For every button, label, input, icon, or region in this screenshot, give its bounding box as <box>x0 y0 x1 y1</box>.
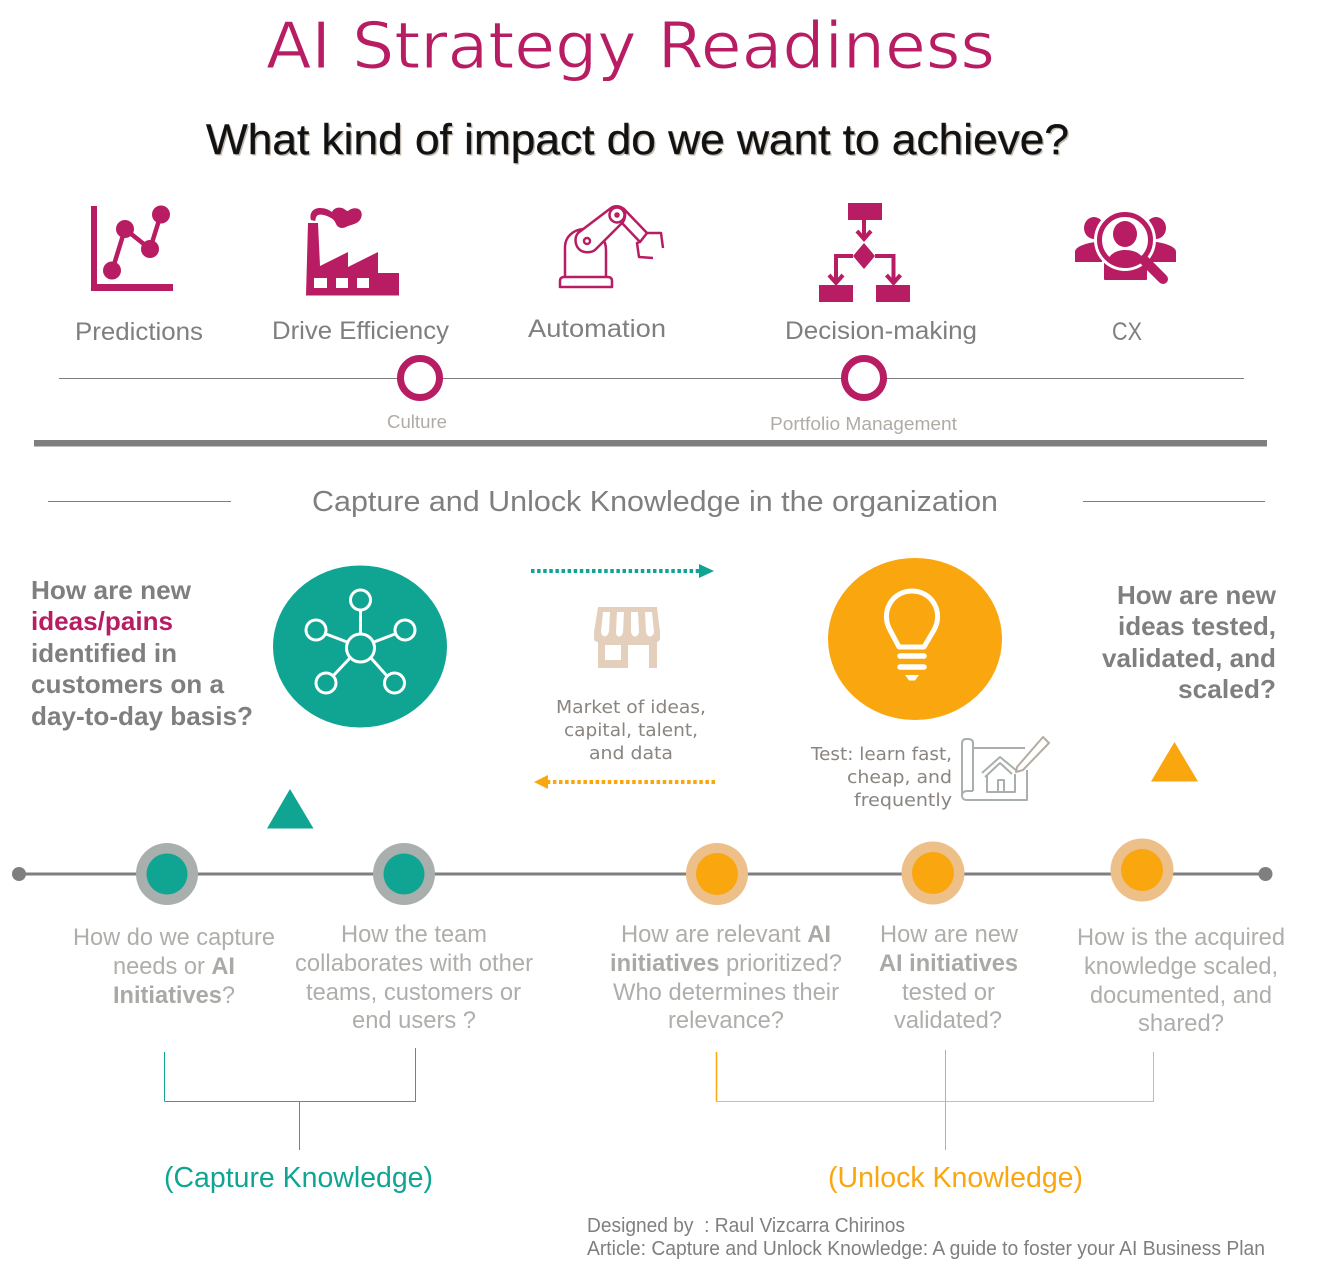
question: capture needs: needs or AI <box>113 953 235 980</box>
subtitle question: What kind of impact do we want to achieve? <box>206 116 1069 164</box>
text block: market: Market of ideas, <box>556 697 706 718</box>
arrow: orange dotted left <box>534 775 715 789</box>
text block: right question: validated, and <box>1102 643 1276 673</box>
label: unlock knowledge: (Unlock Knowledge) <box>828 1162 1083 1194</box>
text block: market <box>556 697 706 764</box>
question: tested initiatives: validated? <box>894 1007 1002 1034</box>
question: team collaboration: end users ? <box>352 1007 476 1034</box>
question: tested initiatives: AI initiatives <box>879 950 1018 977</box>
text block: market: capital, talent, <box>564 720 698 741</box>
title: AI Strategy Readiness <box>266 10 995 84</box>
arrow: teal dotted right <box>531 564 714 578</box>
icon: market stall <box>594 607 660 669</box>
icon: factory <box>306 208 399 296</box>
icon: teal network circle <box>273 566 447 728</box>
text block: right question: ideas tested, <box>1118 611 1276 641</box>
icon: customer experience magnifier <box>1075 209 1176 280</box>
label: predictions: Predictions <box>75 318 203 346</box>
text block: left question: How are new <box>31 575 192 605</box>
text block: left question <box>31 575 253 731</box>
triangle: orange <box>1151 742 1198 782</box>
question: prioritized initiatives: relevance? <box>668 1007 784 1034</box>
section heading: Capture and Unlock Knowledge in the organization <box>312 486 998 518</box>
icon: decision flowchart <box>819 203 910 302</box>
credits: Article: Capture and Unlock Knowledge: A guide to foster your AI Business Plan <box>587 1238 1265 1260</box>
timeline <box>12 838 1272 905</box>
marker: portfolio management <box>844 358 884 398</box>
label: capture knowledge: (Capture Knowledge) <box>164 1162 433 1194</box>
text block: test: frequently <box>854 790 952 811</box>
label: portfolio management: Portfolio Management <box>770 414 957 434</box>
question: capture needs <box>73 924 275 1009</box>
text block: test <box>810 744 952 811</box>
credits: Designed by : Raul Vizcarra Chirinos <box>587 1215 905 1237</box>
subtitle question: What kind of impact do we want to achieve? <box>208 118 1070 166</box>
icon: orange lightbulb circle <box>828 558 1002 720</box>
question: tested initiatives <box>879 921 1019 1034</box>
text block: market: and data <box>589 743 673 764</box>
timeline node: teal 2 <box>373 843 435 905</box>
question: scaled knowledge: shared? <box>1138 1010 1224 1037</box>
question: prioritized initiatives: initiatives prioritized? <box>610 950 842 977</box>
question: tested initiatives: How are new <box>880 921 1019 948</box>
text block: left question: identified in <box>31 638 177 668</box>
icon: robot arm <box>560 206 663 287</box>
timeline node: orange 2 <box>902 842 964 904</box>
text block: test: cheap, and <box>847 767 952 788</box>
question: capture needs: Initiatives? <box>113 982 235 1009</box>
label: drive efficiency: Drive Efficiency <box>272 317 450 345</box>
question: team collaboration: collaborates with other <box>295 950 533 977</box>
question: scaled knowledge: How is the acquired <box>1077 924 1285 951</box>
question: scaled knowledge <box>1077 924 1285 1037</box>
marker: culture <box>400 358 440 398</box>
bracket: unlock <box>716 1050 1154 1150</box>
text block: test: Test: learn fast, <box>810 744 952 765</box>
text block: left question: day-to-day basis? <box>31 701 253 731</box>
question: tested initiatives: tested or <box>902 979 995 1006</box>
question: scaled knowledge: knowledge scaled, <box>1084 953 1278 980</box>
timeline node: teal 1 <box>136 843 198 905</box>
bracket: capture <box>164 1048 416 1150</box>
question: scaled knowledge: documented, and <box>1090 982 1272 1009</box>
text block: left question: customers on a <box>31 669 225 699</box>
label: automation: Automation <box>528 315 666 343</box>
question: capture needs: How do we capture <box>73 924 275 951</box>
question: team collaboration <box>295 921 533 1034</box>
question: prioritized initiatives <box>610 921 842 1034</box>
text block: right question <box>1102 580 1277 704</box>
triangle: teal <box>267 789 314 828</box>
icon: blueprint house and pencil <box>962 737 1049 800</box>
label: decision-making: Decision-making <box>785 317 977 345</box>
text block: left question: ideas/pains <box>31 606 173 636</box>
text block: right question: How are new <box>1117 580 1277 610</box>
question: prioritized initiatives: Who determines their <box>613 979 839 1006</box>
text block: right question: scaled? <box>1178 674 1276 704</box>
question: team collaboration: How the team <box>341 921 487 948</box>
timeline node: orange 3 <box>1110 838 1174 902</box>
question: prioritized initiatives: How are relevant AI <box>621 921 831 948</box>
icon: predictions line chart <box>91 206 173 291</box>
label: culture: Culture <box>387 412 447 432</box>
timeline node: orange 1 <box>686 843 748 905</box>
question: team collaboration: teams, customers or <box>306 979 521 1006</box>
label: CX: CX <box>1112 318 1142 346</box>
credits <box>587 1215 1265 1260</box>
